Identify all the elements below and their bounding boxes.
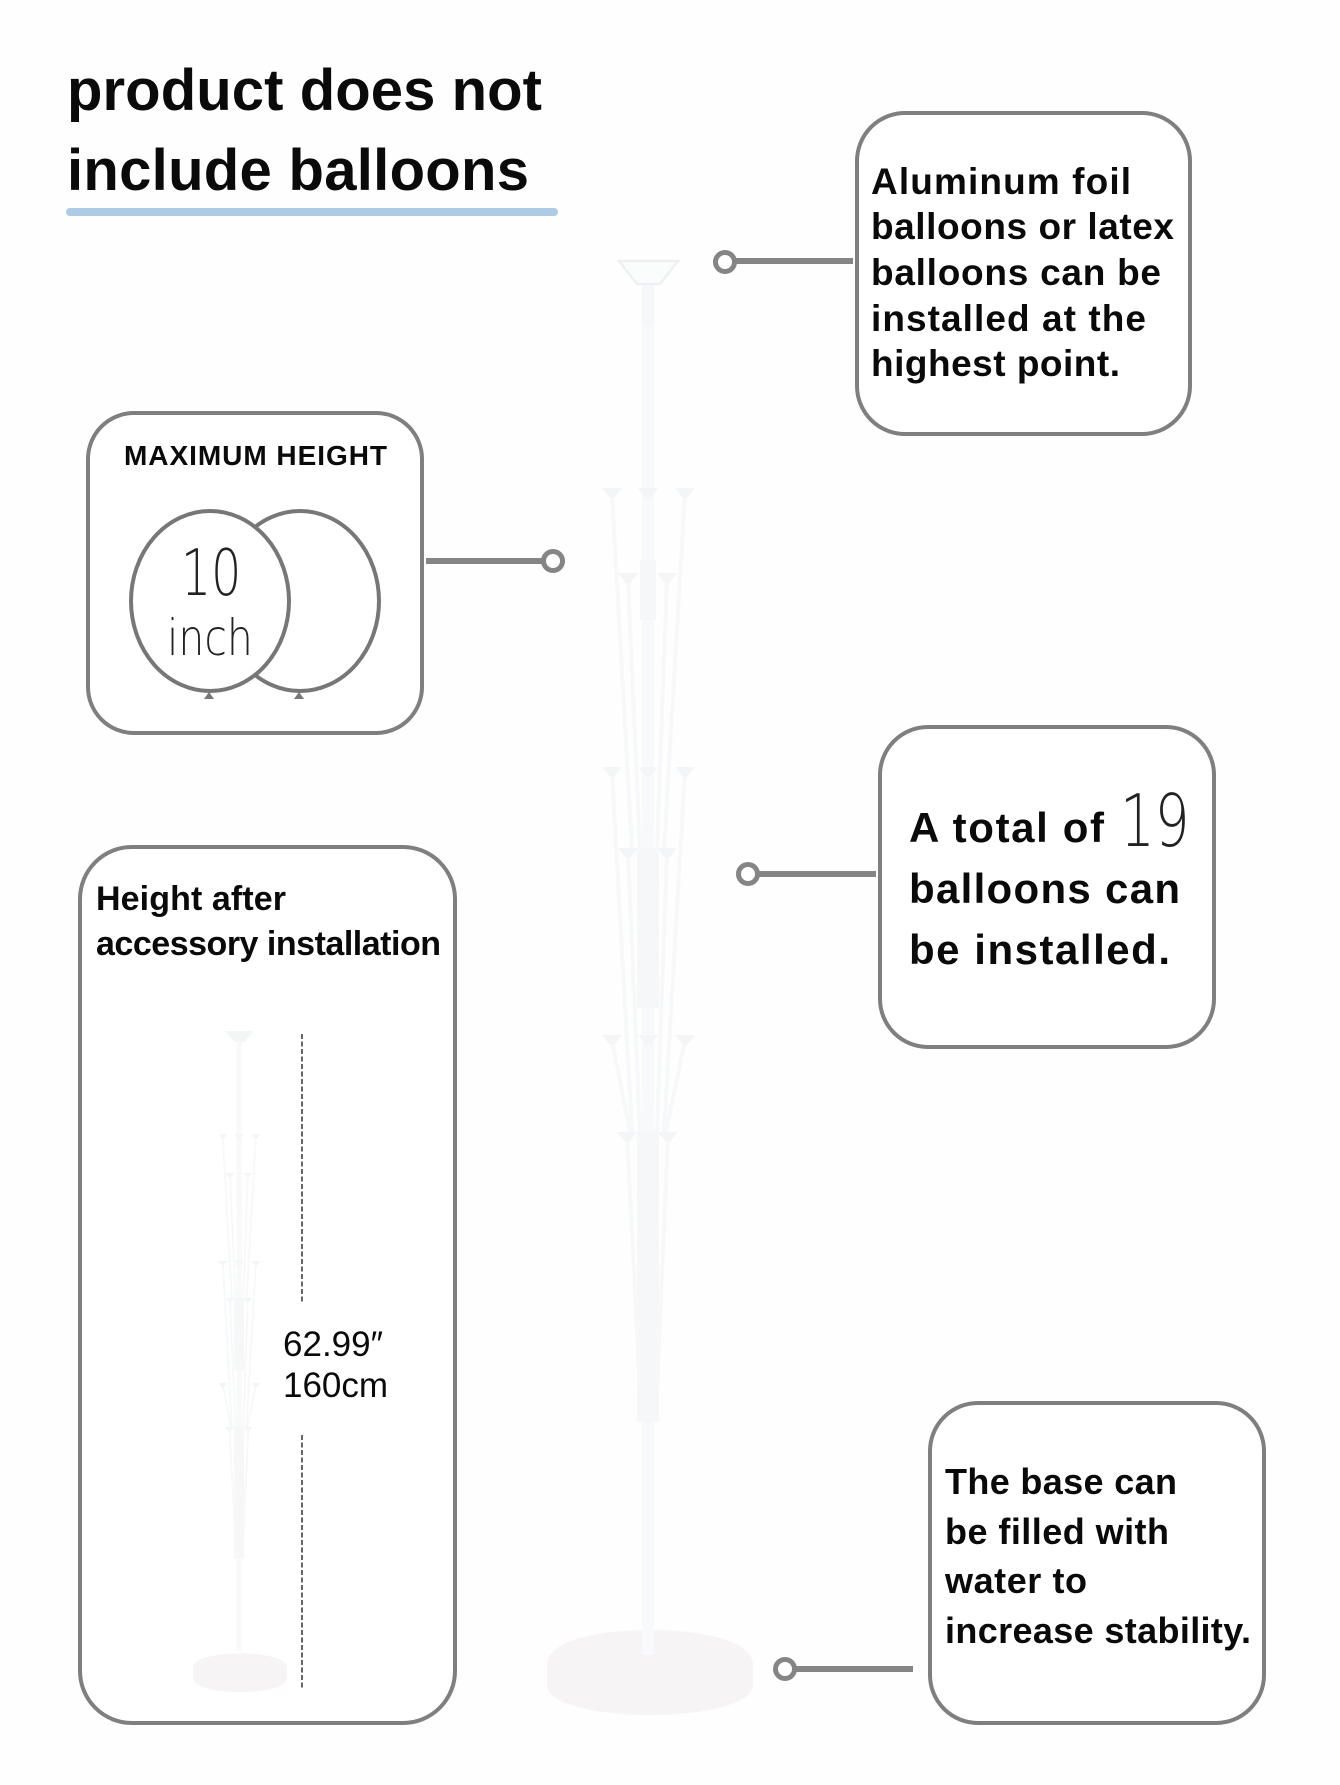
icon: balloons <box>131 511 379 699</box>
title <box>66 58 558 216</box>
title underline <box>66 208 558 216</box>
panel: total balloons: be installed. <box>909 926 1170 973</box>
title: include balloons <box>67 138 529 203</box>
panel: foil or latex balloons: balloons can be <box>871 252 1161 293</box>
panel: base water fill: be filled with <box>945 1511 1169 1552</box>
panel: foil or latex balloons: highest point. <box>871 343 1120 384</box>
dimension label <box>283 1325 388 1405</box>
top balloon holder <box>619 261 678 284</box>
panel: total balloons: A total of <box>909 804 1105 851</box>
connector: maximum height <box>426 552 562 570</box>
panel: total balloons: 19 <box>1120 781 1190 864</box>
panel: total balloons <box>880 727 1214 1047</box>
dimension line <box>301 1034 303 1688</box>
panel: height after installation: Height after <box>96 880 286 918</box>
main balloon stand <box>547 261 753 1715</box>
panel: foil or latex balloons: Aluminum foil <box>871 161 1131 202</box>
panel: maximum height: inch <box>167 609 253 667</box>
cups <box>602 488 695 1142</box>
panel: base water fill <box>930 1403 1264 1723</box>
panel: base water fill: increase stability. <box>945 1610 1251 1651</box>
dimension label: 62.99″ <box>283 1325 383 1364</box>
dimension label: 160cm <box>283 1366 388 1405</box>
rods <box>612 494 685 1390</box>
panel: foil or latex balloons <box>857 113 1190 434</box>
panel: height after installation: accessory installation <box>96 925 441 963</box>
panel: maximum height: MAXIMUM HEIGHT <box>124 440 387 471</box>
connector: top holder <box>716 252 853 272</box>
panel: foil or latex balloons: installed at the <box>871 298 1146 339</box>
panel: total balloons: balloons can <box>909 865 1180 912</box>
panel: height after installation <box>80 847 455 1723</box>
panel: maximum height <box>88 413 422 733</box>
connector: total balloons <box>738 864 876 884</box>
panel: maximum height: 10 <box>181 537 241 611</box>
title: product does not <box>67 58 542 123</box>
panel: base water fill: The base can <box>945 1461 1177 1502</box>
base <box>547 1630 753 1715</box>
mini balloon stand <box>193 1031 287 1692</box>
panel: foil or latex balloons: balloons or latex <box>871 206 1174 247</box>
panel: base water fill: water to <box>944 1560 1087 1601</box>
connector: base <box>776 1660 913 1678</box>
